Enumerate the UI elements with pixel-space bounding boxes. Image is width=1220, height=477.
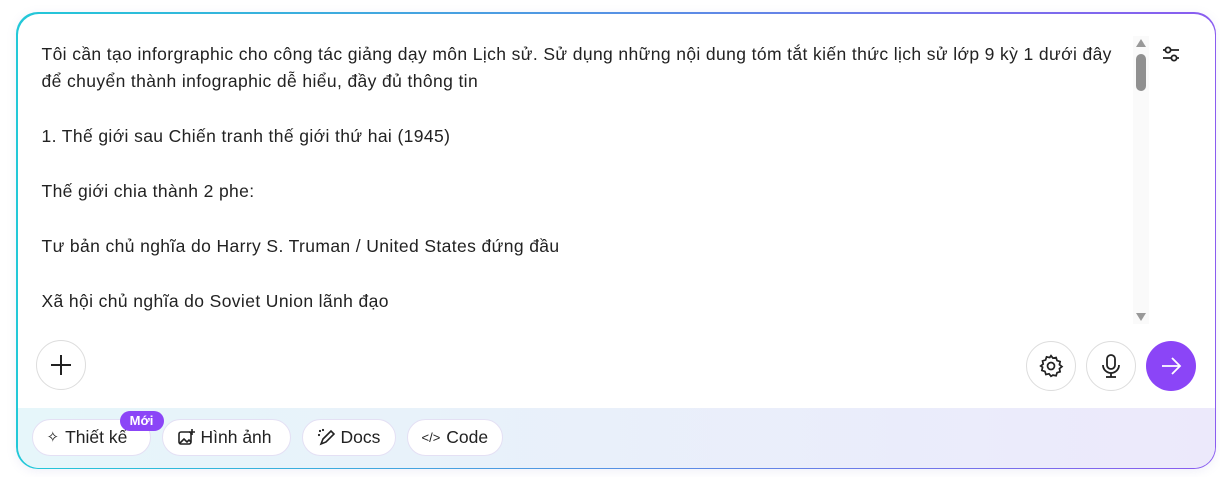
- prompt text: để chuyển thành infographic dễ hiểu, đầy đủ thông tin: [42, 71, 478, 91]
- icon: settings sliders: [1163, 46, 1179, 62]
- chip: Hình ảnh: [162, 418, 290, 456]
- chip: Code: Code: [446, 426, 488, 446]
- button: mic: [1086, 340, 1136, 390]
- prompt text: Xã hội chủ nghĩa do Soviet Union lãnh đạo: [42, 291, 389, 311]
- chip: Code: </>: [422, 430, 440, 444]
- scrollbar: [1132, 36, 1148, 324]
- chip: Thiết kế: [32, 418, 150, 456]
- chip: Thiết kế: ✧: [46, 429, 59, 446]
- prompt text: Tư bản chủ nghĩa do Harry S. Truman / United States đứng đầu: [42, 236, 560, 256]
- prompt text: Thế giới chia thành 2 phe:: [42, 181, 255, 201]
- chip: Thiết kế: Thiết kế: [65, 426, 127, 446]
- badge: Mới: [120, 410, 164, 430]
- button: add: [36, 340, 86, 390]
- chip: Docs: [302, 418, 396, 456]
- prompt text: Tôi cần tạo inforgraphic cho công tác giảng dạy môn Lịch sử. Sử dụng những nội dung tóm tắt kiến thức lịch sử lớp 9 kỳ 1 dưới đây: [42, 44, 1112, 64]
- chip: Code: [406, 418, 502, 456]
- bottom toolbar: [18, 408, 1214, 468]
- badge: Mới: Mới: [130, 412, 153, 428]
- button: gear: [1026, 340, 1076, 390]
- chip: Docs: Docs: [340, 426, 380, 446]
- button: send: [1146, 340, 1196, 390]
- prompt text: 1. Thế giới sau Chiến tranh thế giới thứ hai (1945): [42, 126, 450, 146]
- prompt text: [42, 44, 1112, 311]
- chip: Hình ảnh: Hình ảnh: [200, 426, 272, 446]
